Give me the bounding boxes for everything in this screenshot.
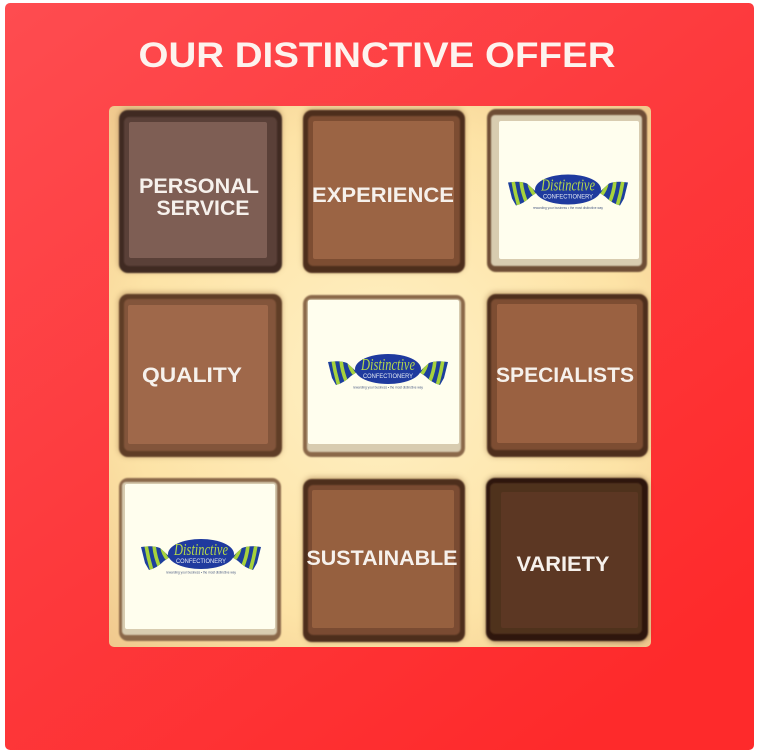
logo: distinctive confectionery: rewarding your business • the most distinctive way	[166, 570, 236, 574]
logo: distinctive confectionery	[139, 539, 263, 574]
logo: distinctive confectionery	[506, 174, 630, 210]
label: experience: EXPERIENCE	[312, 184, 454, 207]
chocolate: quality	[118, 292, 282, 457]
chocolate: variety	[486, 477, 648, 642]
logo: distinctive confectionery: CONFECTIONERY	[543, 194, 594, 200]
logo: distinctive confectionery: Distinctive	[540, 176, 595, 194]
chocolate: white logo top right	[487, 109, 647, 272]
logo: distinctive confectionery: rewarding your business • the most distinctive way	[533, 206, 603, 210]
chocolate: sustainable	[303, 477, 465, 642]
chocolate: personal service: SERVICE	[156, 197, 250, 220]
logo: distinctive confectionery: Distinctive	[360, 355, 415, 374]
chocolate: white logo centre	[303, 295, 465, 457]
chocolate: specialists	[486, 292, 648, 457]
logo: distinctive confectionery	[326, 354, 450, 390]
chocolate: white logo bottom left	[119, 478, 281, 641]
label: personal service: PERSONAL	[139, 175, 259, 198]
logo: distinctive confectionery: Distinctive	[173, 540, 228, 559]
tray window	[109, 106, 651, 647]
chocolate: experience	[303, 108, 465, 273]
title: OUR DISTINCTIVE OFFER	[138, 36, 616, 75]
logo: distinctive confectionery: rewarding your business • the most distinctive way	[353, 386, 423, 390]
label: sustainable: SUSTAINABLE	[306, 547, 458, 570]
logo: distinctive confectionery: CONFECTIONERY	[176, 558, 227, 565]
label: specialists: SPECIALISTS	[496, 364, 634, 387]
label: quality: QUALITY	[142, 364, 242, 387]
chocolate: personal service	[118, 108, 282, 273]
label: variety: VARIETY	[516, 553, 610, 576]
logo: distinctive confectionery: CONFECTIONERY	[363, 373, 414, 380]
